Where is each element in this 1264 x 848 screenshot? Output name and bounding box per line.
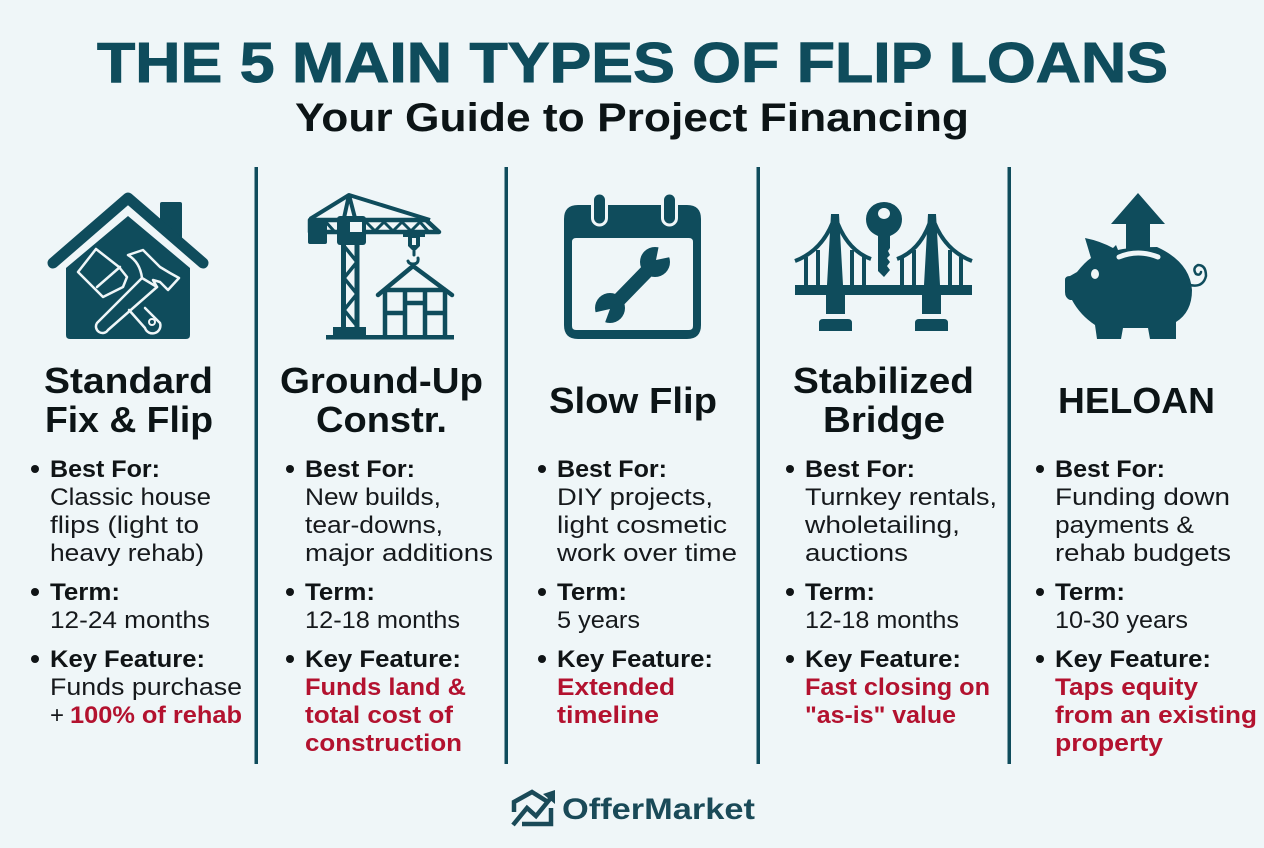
details list: auctions bbox=[805, 540, 908, 567]
details list: 10-30 years bbox=[1055, 607, 1188, 634]
details list: Taps equity bbox=[1055, 674, 1199, 701]
details list: Key Feature: bbox=[805, 646, 961, 673]
details list: Classic house bbox=[50, 484, 211, 511]
icon: house with hammer and paintbrush bbox=[53, 198, 203, 339]
details list: major additions bbox=[305, 540, 493, 567]
details list: New builds, bbox=[305, 484, 441, 511]
panel: Ground-Up Construction: Constr. bbox=[316, 399, 447, 440]
icon: calendar with wrench bbox=[564, 193, 701, 339]
heading: Slow Flip bbox=[549, 380, 717, 421]
details list: 100% of rehab bbox=[70, 702, 242, 729]
details list: DIY projects, bbox=[557, 484, 713, 511]
details list: Term: bbox=[50, 579, 120, 606]
details list: light cosmetic bbox=[557, 512, 727, 539]
panel: Standard Fix & Flip: Fix & Flip bbox=[45, 399, 213, 440]
details list: Funds purchase bbox=[50, 674, 242, 701]
details list: 12-18 months bbox=[805, 607, 959, 634]
details list: flips (light to bbox=[50, 512, 199, 539]
details list: Term: bbox=[1055, 579, 1125, 606]
details list: 12-18 months bbox=[305, 607, 460, 634]
details list: Term: bbox=[805, 579, 875, 606]
details list: timeline bbox=[557, 702, 659, 729]
details list: Key Feature: bbox=[557, 646, 713, 673]
icon: crane lifting house frame bbox=[308, 195, 454, 340]
panel: Slow Flip bbox=[538, 193, 737, 729]
panel: Stabilized Bridge: Bridge bbox=[823, 399, 945, 440]
details list: 12-24 months bbox=[50, 607, 210, 634]
details list: total cost of bbox=[305, 702, 454, 729]
details list: Extended bbox=[557, 674, 675, 701]
details list: tear-downs, bbox=[305, 512, 443, 539]
panel: Stabilized Bridge bbox=[786, 202, 997, 729]
details list: property bbox=[1055, 730, 1164, 757]
heading: Standard bbox=[44, 360, 213, 401]
details list: Best For: bbox=[557, 456, 667, 483]
details list: Funds land & bbox=[305, 674, 466, 701]
details list: Key Feature: bbox=[305, 646, 461, 673]
details list: 5 years bbox=[557, 607, 640, 634]
details list: wholetailing, bbox=[804, 512, 960, 539]
details list: payments & bbox=[1055, 512, 1194, 539]
details list: + bbox=[50, 702, 64, 729]
icon: bridge with key bbox=[795, 202, 972, 331]
details list: rehab budgets bbox=[1055, 540, 1231, 567]
panel: Standard Fix & Flip bbox=[31, 198, 242, 729]
details list: work over time bbox=[556, 540, 737, 567]
details list: Best For: bbox=[1055, 456, 1165, 483]
panel: Ground-Up Construction bbox=[280, 195, 493, 757]
logo: OfferMarket bbox=[513, 790, 755, 826]
details list: Best For: bbox=[50, 456, 160, 483]
details list bbox=[286, 456, 493, 757]
details list: Fast closing on bbox=[805, 674, 990, 701]
details list: "as-is" value bbox=[805, 702, 956, 729]
heading: HELOAN bbox=[1058, 380, 1215, 421]
title: THE 5 MAIN TYPES OF FLIP LOANS bbox=[97, 31, 1168, 95]
details list: Term: bbox=[305, 579, 375, 606]
details list bbox=[786, 456, 997, 729]
heading: Stabilized bbox=[793, 360, 974, 401]
heading: Ground-Up bbox=[280, 360, 483, 401]
details list bbox=[538, 456, 737, 729]
details list: from an existing bbox=[1055, 702, 1257, 729]
details list bbox=[1036, 456, 1257, 757]
details list: Funding down bbox=[1055, 484, 1230, 511]
details list: Term: bbox=[557, 579, 627, 606]
details list: heavy rehab) bbox=[50, 540, 204, 567]
details list: construction bbox=[305, 730, 462, 757]
details list: Best For: bbox=[805, 456, 915, 483]
details list: Key Feature: bbox=[1055, 646, 1211, 673]
logo: OfferMarket: OfferMarket bbox=[562, 793, 755, 826]
details list bbox=[31, 456, 242, 729]
details list: Key Feature: bbox=[50, 646, 205, 673]
subtitle: Your Guide to Project Financing bbox=[295, 96, 969, 140]
panel: HELOAN bbox=[1036, 193, 1257, 757]
icon: piggy bank with up arrow bbox=[1065, 193, 1206, 339]
details list: Best For: bbox=[305, 456, 415, 483]
details list: Turnkey rentals, bbox=[805, 484, 997, 511]
